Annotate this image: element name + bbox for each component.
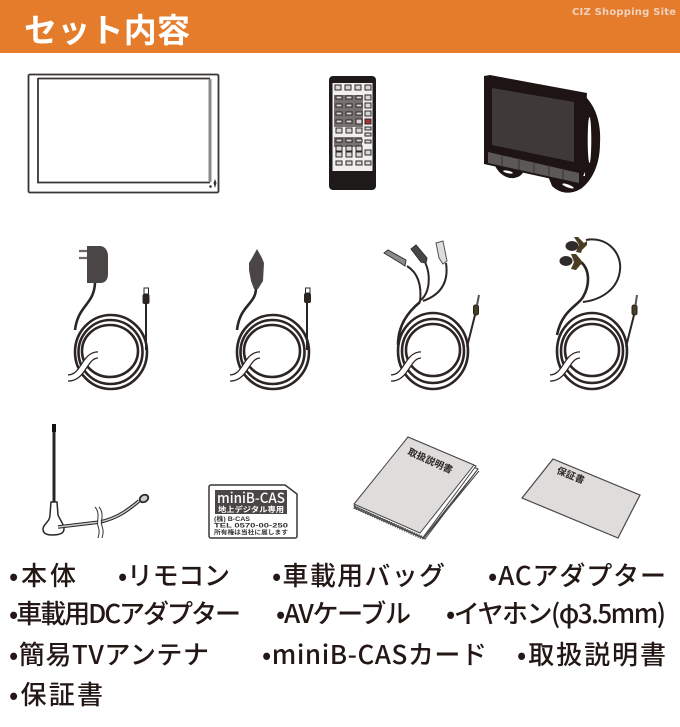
icon: warranty card: 保証書	[555, 465, 587, 487]
icon: miniB-CAS card: 地上デジタル専用	[218, 504, 284, 514]
item: DC adapter: •車載用DCアダプター	[9, 594, 241, 631]
icon: miniB-CAS card	[209, 485, 297, 538]
icon: car bag with monitor	[484, 75, 600, 193]
icon: warranty card	[522, 459, 640, 538]
icon: miniB-CAS card: TEL 0570-00-250	[214, 522, 289, 530]
icon: miniB-CAS card: (株) B-CAS	[214, 515, 251, 523]
icon: miniB-CAS card: miniB-CAS	[217, 488, 285, 508]
icon: monitor	[28, 74, 218, 192]
item: manual: •取扱説明書	[517, 635, 666, 672]
item: AV cable: •AVケーブル	[276, 594, 411, 631]
item: earphone: •イヤホン(φ3.5mm)	[446, 594, 666, 631]
icon: earphones	[550, 237, 637, 389]
site name: CIZ Shopping Site	[572, 7, 676, 18]
item: warranty: •保証書	[9, 675, 103, 712]
icon: AV cable	[384, 241, 479, 389]
title: セット内容	[24, 12, 190, 49]
icon: remote control	[329, 76, 376, 190]
item list	[9, 556, 666, 712]
item: main unit: •本体	[9, 556, 76, 593]
icon: TV antenna	[43, 424, 150, 538]
header band	[0, 0, 680, 53]
icon: instruction manual	[354, 437, 479, 539]
item: miniB-CAS card: •miniB-CASカード	[262, 635, 487, 672]
item: AC adapter: •ACアダプター	[488, 556, 666, 593]
item: remote: •リモコン	[118, 556, 230, 593]
icon: car DC adapter with cable	[230, 249, 311, 389]
icon: miniB-CAS card: 所有権は当社に属します	[214, 528, 288, 536]
item: TV antenna: •簡易TVアンテナ	[9, 635, 209, 672]
item: car bag: •車載用バッグ	[272, 556, 445, 593]
icon: AC adapter with cable	[68, 246, 150, 389]
icon: instruction manual: 取扱説明書	[406, 446, 455, 476]
